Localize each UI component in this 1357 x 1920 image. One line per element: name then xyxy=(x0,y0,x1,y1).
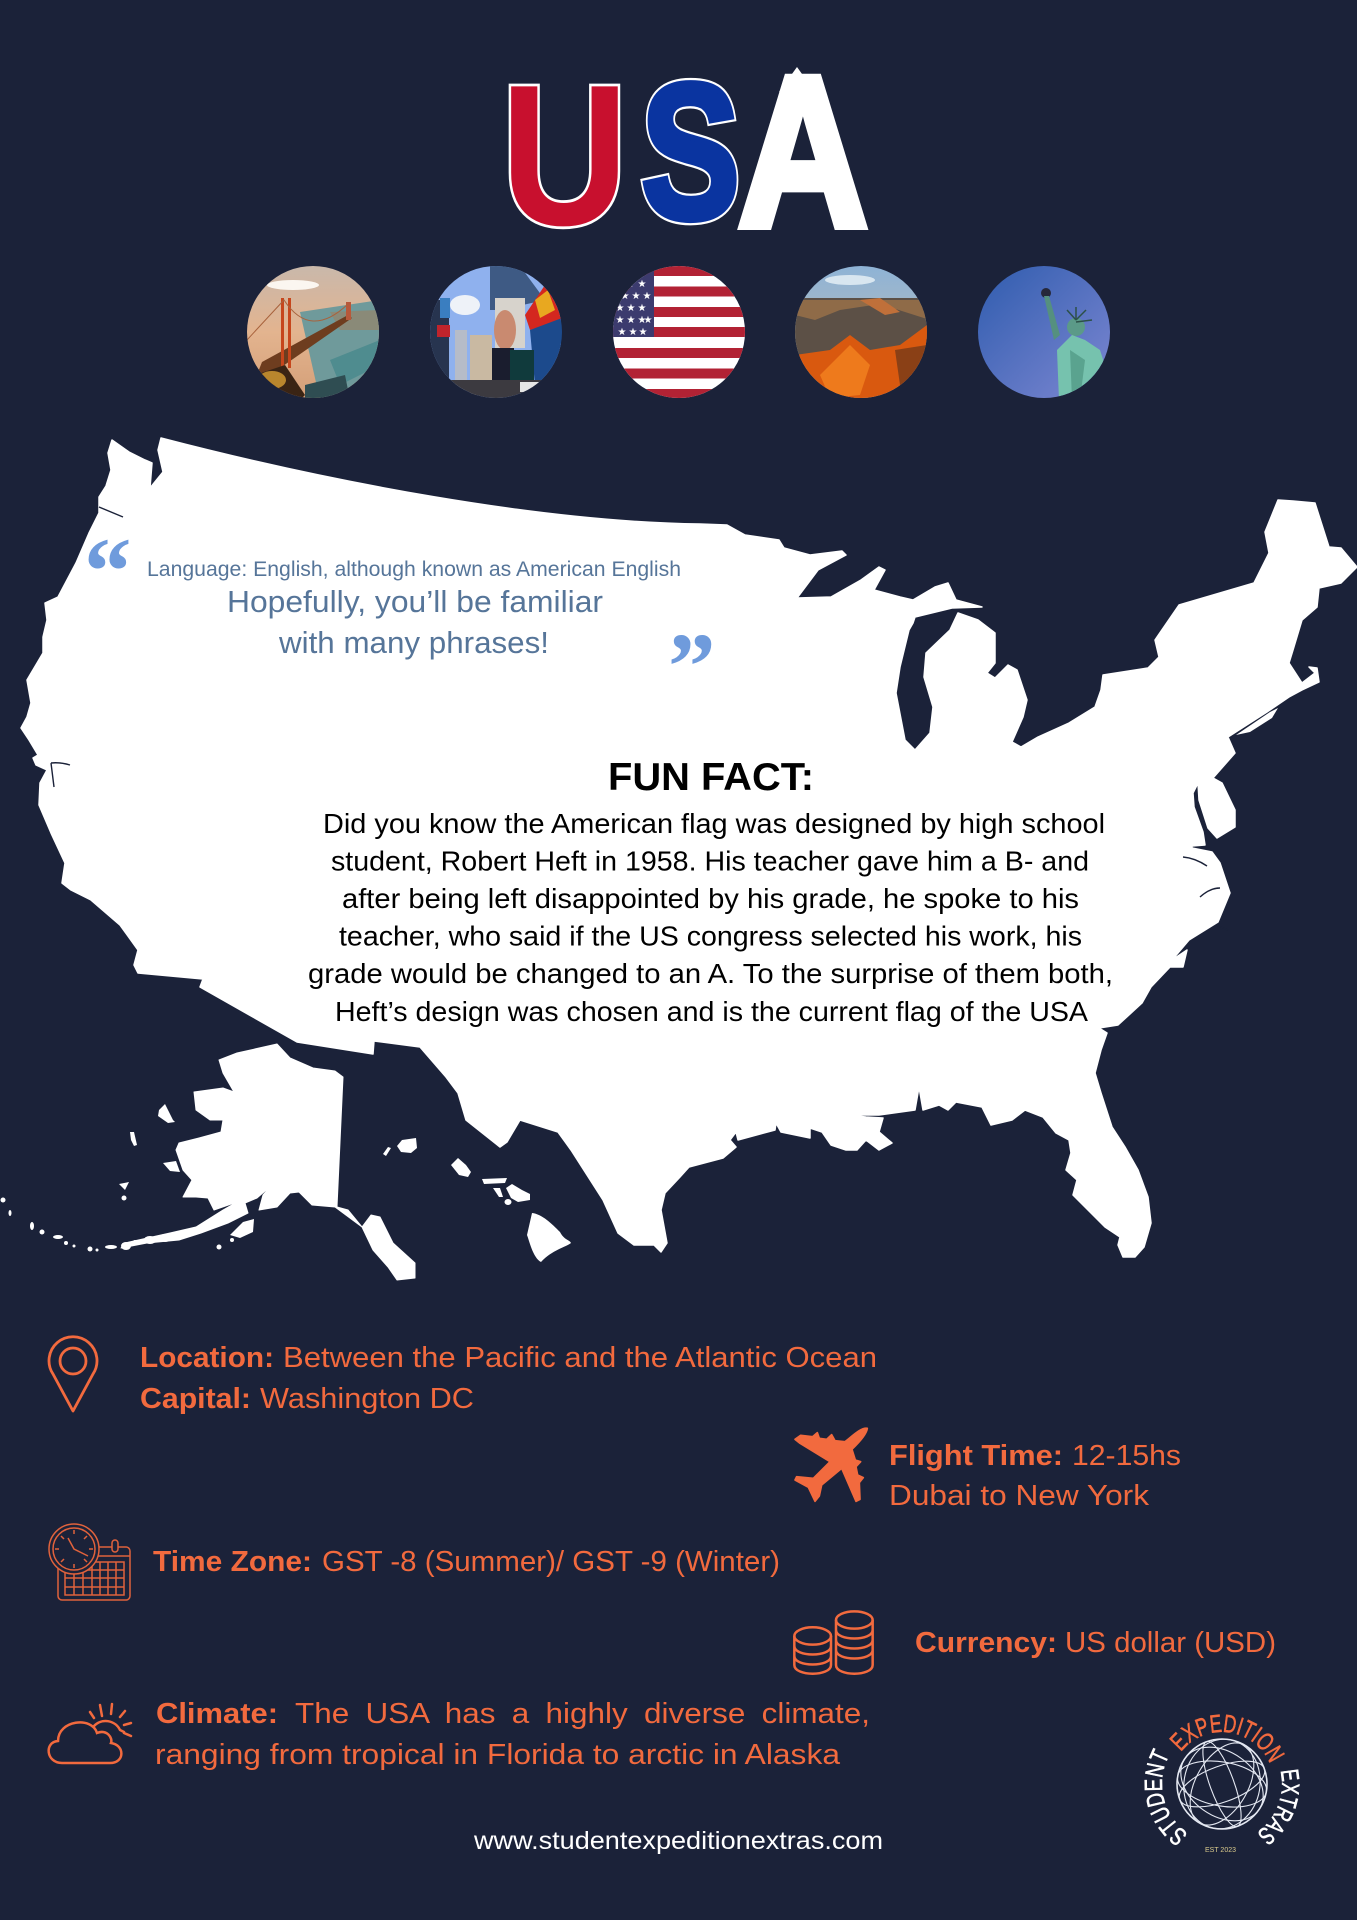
fun fact body: teacher, who said if the US congress selected his work, his xyxy=(339,920,1082,952)
photo: American flag: ★ xyxy=(618,327,627,338)
flight time text: 12-15hs xyxy=(1072,1440,1181,1472)
climate text xyxy=(155,1698,870,1771)
map: contiguous states xyxy=(21,438,1357,1257)
language text xyxy=(147,558,681,660)
logo: established year: EST 2023 xyxy=(1205,1847,1236,1854)
title: USA: S xyxy=(641,44,740,259)
fun fact body: after being left disappointed by his grade, he spoke to his xyxy=(342,883,1079,914)
language text: Language: English, although known as American English xyxy=(147,558,681,581)
photo: Grand Canyon xyxy=(795,266,930,400)
climate text: ranging from tropical in Florida to arctic in Alaska xyxy=(155,1739,841,1771)
currency text: US dollar (USD) xyxy=(1065,1627,1276,1659)
climate text: The USA has a highly diverse climate, xyxy=(295,1698,870,1730)
climate text: Climate: xyxy=(156,1698,278,1730)
fun fact body: grade would be changed to an A. To the surprise of them both, xyxy=(308,958,1113,989)
location and capital text: Capital: xyxy=(140,1383,251,1415)
opening quote mark: “ xyxy=(84,518,132,624)
location and capital text: Washington DC xyxy=(260,1383,474,1415)
photo: American flag: ★ xyxy=(644,315,653,326)
logo: EXPEDITION: EXPEDITION xyxy=(1169,1714,1285,1763)
photo: Statue of Liberty xyxy=(978,266,1110,400)
photo: American flag: ★ xyxy=(616,315,625,326)
currency text xyxy=(915,1627,1276,1659)
icon: clock and calendar xyxy=(49,1524,130,1600)
fun fact body: Heft’s design was chosen and is the current flag of the USA xyxy=(335,996,1088,1027)
fun fact body: Did you know the American flag was designed by high school xyxy=(323,808,1105,839)
icon: coin stacks xyxy=(794,1611,873,1674)
flight time text: Flight Time: xyxy=(889,1440,1063,1472)
icon: cloud and sun xyxy=(49,1704,131,1763)
location and capital text: Location: xyxy=(140,1342,274,1374)
location and capital text xyxy=(140,1342,877,1415)
logo: EXTRAS: EXTRAS xyxy=(1258,1769,1300,1844)
title: USA: U xyxy=(501,44,628,266)
photo: American flag: ★ xyxy=(627,303,636,314)
currency text: Currency: xyxy=(915,1627,1057,1659)
fun fact heading: FUN FACT: xyxy=(608,756,814,799)
map: small inlets xyxy=(51,507,1228,930)
closing quote mark: ” xyxy=(668,614,716,720)
fun fact body xyxy=(308,808,1113,1027)
flight time text xyxy=(889,1440,1181,1512)
time zone text: Time Zone: xyxy=(153,1546,312,1578)
map of the USA xyxy=(0,438,1357,1280)
photo: American flag: ★ xyxy=(627,315,636,326)
fun fact body: student, Robert Heft in 1958. His teacher gave him a B- and xyxy=(331,846,1089,876)
logo: STUDENT: STUDENT xyxy=(1144,1748,1186,1845)
title: USA: A xyxy=(738,32,868,271)
title: USA: U xyxy=(501,44,628,266)
logo: Student Expedition Extras xyxy=(1144,1714,1300,1854)
location and capital text: Between the Pacific and the Atlantic Ocean xyxy=(283,1342,877,1374)
website url: www.studentexpeditionextras.com xyxy=(473,1827,883,1855)
photo: Golden Gate Bridge xyxy=(247,266,380,400)
language text: with many phrases! xyxy=(278,625,549,660)
map: Alaskan islands xyxy=(0,1104,254,1252)
icon: airplane xyxy=(795,1428,867,1501)
title: USA xyxy=(501,32,868,271)
icon: location pin xyxy=(49,1337,97,1411)
photo: American flag: ★ xyxy=(626,279,635,290)
flight time text: Dubai to New York xyxy=(889,1480,1150,1512)
photo: American flag: ★ xyxy=(621,291,630,302)
logo: wireframe globe xyxy=(1167,1732,1277,1836)
map: Long Island xyxy=(1236,708,1278,735)
photo: American flag: ★ xyxy=(638,279,647,290)
photo: American flag: ★ xyxy=(638,303,647,314)
map: Alaska xyxy=(121,1044,415,1280)
time zone text: GST -8 (Summer)/ GST -9 (Winter) xyxy=(322,1546,780,1578)
photo: Times Square xyxy=(429,266,562,400)
photo: American flag: ★ xyxy=(632,291,641,302)
title: USA: S xyxy=(641,44,740,259)
map: Hawaii xyxy=(383,1138,571,1262)
photo: American flag: ★ xyxy=(629,327,638,338)
photo: American flag: ★ xyxy=(643,291,652,302)
photo: American flag: ★ xyxy=(639,327,648,338)
photo: American flag: ★ xyxy=(638,315,647,326)
photo: American flag: ★ xyxy=(616,303,625,314)
photo: American flag xyxy=(613,266,745,399)
language text: Hopefully, you’ll be familiar xyxy=(227,584,603,619)
